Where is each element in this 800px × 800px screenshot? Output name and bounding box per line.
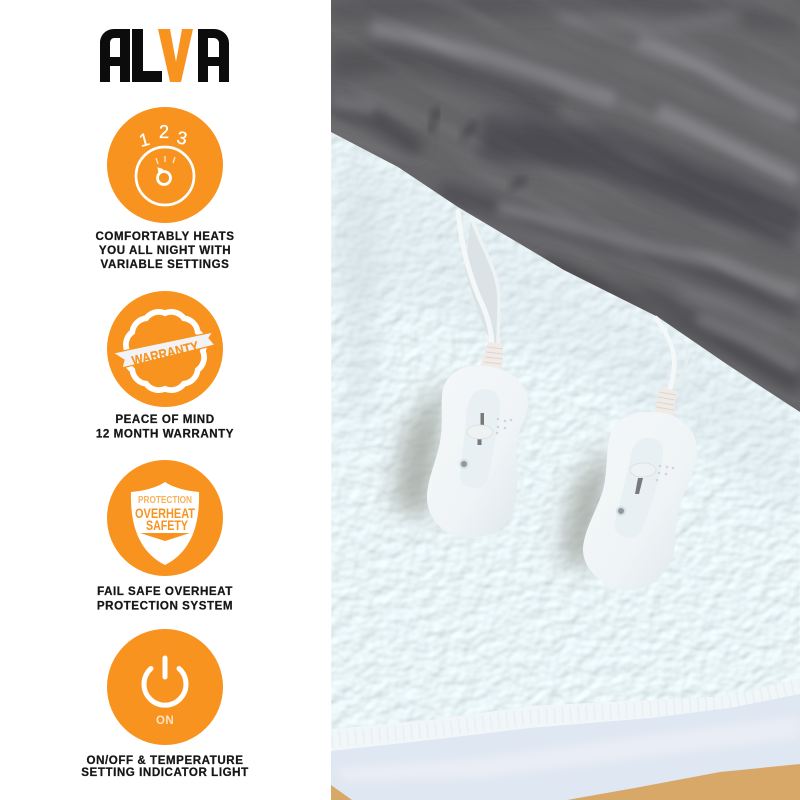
icon: heat dial: 3 (175, 127, 189, 149)
icon: protection shield (107, 460, 223, 576)
shadows beside controllers (392, 375, 445, 520)
recessed slot (624, 438, 655, 490)
slider knob (630, 463, 656, 477)
icon: warranty badge: WARRANTY (130, 339, 200, 368)
right controller cable (656, 318, 687, 395)
feature: variable heat settings (95, 107, 235, 271)
left controller cable (458, 212, 499, 345)
caption: COMFORTABLY HEATS (95, 230, 235, 243)
icon: protection shield: PROTECTION (138, 495, 192, 506)
wooden floor (331, 764, 800, 800)
logo letter V (158, 29, 193, 82)
sherpa fleece underlay (331, 120, 800, 760)
controller body (583, 412, 697, 590)
photo: electric blanket controllers on sherpa fleece (331, 0, 800, 800)
fleece upper shading (344, 168, 789, 482)
recessed slot (464, 389, 491, 438)
logo letter A (100, 29, 130, 82)
icon: heat dial: 1 (137, 129, 152, 151)
controller body (427, 366, 528, 538)
stitched hem (331, 678, 800, 751)
grey plush blanket (331, 0, 800, 412)
caption: YOU ALL NIGHT WITH (99, 244, 231, 257)
setting dots (496, 418, 512, 434)
icon: warranty badge (107, 291, 223, 407)
logo letter L (132, 29, 162, 82)
caption: PEACE OF MIND (115, 413, 215, 426)
indicator light (459, 459, 469, 469)
caption: SETTING INDICATOR LIGHT (81, 766, 249, 779)
caption: PROTECTION SYSTEM (97, 600, 233, 612)
feature: on/off indicator (81, 629, 249, 779)
setting dots (656, 465, 674, 481)
plush nap texture (331, 0, 800, 308)
fleece underside fold (331, 690, 800, 800)
icon: protection shield: SAFETY (146, 517, 188, 533)
slider track (635, 478, 643, 494)
right controller (583, 387, 697, 590)
icon: heat dial: 2 (159, 122, 169, 142)
slider knob (467, 425, 493, 439)
icon: power button: ON (156, 715, 174, 727)
left panel background (0, 0, 331, 800)
blanket sheen streaks (331, 0, 800, 394)
icon: heat dial (107, 107, 223, 223)
cable strain relief (654, 387, 677, 418)
caption: VARIABLE SETTINGS (101, 258, 229, 271)
cable strain relief (480, 342, 503, 370)
icon: power button (107, 629, 223, 745)
logo: ALVA (100, 29, 229, 82)
logo letter A (198, 29, 229, 82)
feature: overheat protection (97, 460, 233, 612)
left controller (427, 342, 528, 538)
icon: protection shield: OVERHEAT (135, 505, 195, 521)
slider track (478, 413, 484, 445)
feature: warranty (96, 291, 234, 440)
caption: ON/OFF & TEMPERATURE (86, 754, 244, 767)
indicator light (616, 506, 626, 516)
caption: 12 MONTH WARRANTY (96, 428, 234, 440)
caption: FAIL SAFE OVERHEAT (97, 585, 233, 598)
blanket dents (430, 108, 438, 132)
